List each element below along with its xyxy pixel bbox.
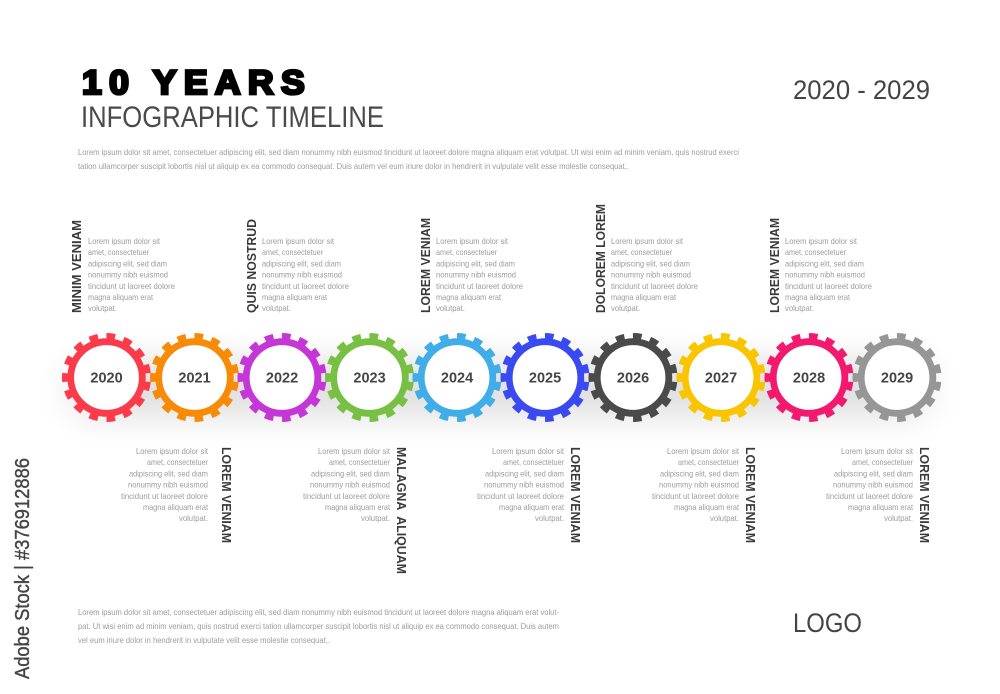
panel: upper text 1: nonummy nibh euismod [88,270,168,280]
panel: lower text 5: volutpat. [884,513,913,523]
gear 2026 [589,334,677,421]
subtitle: infographic timeline: INFOGRAPHIC TIMELINE [81,101,384,134]
panel: upper text 4: tincidunt ut laoreet dolore [611,281,698,291]
gear shadow [70,362,930,416]
panel: upper text 1: volutpat. [88,303,117,313]
panel: upper text 1: magna aliquam erat [88,292,154,302]
stock id side label: Adobe Stock | #376912886 [12,458,34,679]
panel: lower heading lorem veniam 4: LOREM VENIAM [917,447,931,543]
footer text block: Lorem ipsum dolor sit amet, consectetuer adipiscing elit, sed diam nonummy nibh euismod tincidunt ut laoreet dolore magna aliquam erat volut- [78,607,559,617]
logo: LOGO [793,608,862,638]
panel: upper text 4: Lorem ipsum dolor sit [611,236,684,246]
panel: upper text 4: amet, consectetuer [611,247,672,257]
panel: lower heading lorem veniam 3: LOREM VENIAM [743,447,757,543]
footer text block: pat. Ut wisi enim ad minim veniam, quis nostrud exerci tation ullamcorper suscipit lobortis nisl ut aliquip ex ea commodo consequat. Duis autem [78,621,559,631]
panel: lower text 2: volutpat. [361,513,390,523]
panel: upper text 1: amet, consectetuer [88,247,149,257]
panel: upper text 3: tincidunt ut laoreet dolore [436,281,523,291]
panel: upper text 3 [436,236,523,313]
panel: upper text 3: volutpat. [436,303,465,313]
footer text block [78,607,559,645]
panel: lower text 2: amet, consectetuer [329,457,390,467]
panel: upper text 2 [262,236,349,313]
panel: lower text 5: nonummy nibh euismod [833,480,913,490]
panel: upper text 2: volutpat. [262,303,291,313]
panel: lower heading lorem veniam 1: LOREM VENIAM [219,447,233,543]
panel: upper text 2: tincidunt ut laoreet dolore [262,281,349,291]
intro text block: tation ullamcorper suscipit lobortis nisl ut aliquip ex ea commodo consequat. Duis autem vel eum iriure dolor in hendrerit in vulputate velit esse molestie consequat,. [78,161,629,171]
panel: upper text 3: adipiscing elit, sed diam [436,258,515,268]
panel: upper heading quis nostrud: QUIS NOSTRUD [245,219,259,313]
panel: upper text 5: Lorem ipsum dolor sit [785,236,858,246]
gear 2027: 2027 [705,370,737,386]
panel: upper heading minim veniam: MINIM VENIAM [70,220,84,313]
panel: lower text 3: amet, consectetuer [503,457,564,467]
gear timeline [63,334,941,421]
panel: upper text 3: amet, consectetuer [436,247,497,257]
title: 10 years: 10 YEARS [82,64,312,102]
panel: upper text 5: volutpat. [785,303,814,313]
gear 2021 [151,334,238,421]
gear 2024: 2024 [441,370,473,386]
intro text block [78,147,739,171]
gear 2021: 2021 [178,370,211,386]
panel: upper text 4: magna aliquam erat [611,292,677,302]
panel: lower text 4: adipiscing elit, sed diam [660,468,739,478]
panel: upper text 5: nonummy nibh euismod [785,270,865,280]
panel: upper text 1: adipiscing elit, sed diam [88,258,167,268]
panel: lower text 3: nonummy nibh euismod [484,480,564,490]
panel: upper text 2: Lorem ipsum dolor sit [262,236,335,246]
gear 2029 [853,334,941,421]
panel: lower text 5: amet, consectetuer [852,457,913,467]
panel: upper text 3: nonummy nibh euismod [436,270,516,280]
panel: lower text 4: magna aliquam erat [674,502,740,512]
panel: upper text 5: amet, consectetuer [785,247,846,257]
panel: lower text 2: nonummy nibh euismod [310,480,390,490]
panel: lower text 1: magna aliquam erat [143,502,209,512]
panel: lower text 4: amet, consectetuer [678,457,739,467]
panel: lower text 4: volutpat. [710,513,739,523]
gear 2028 [765,334,853,421]
panel: lower text 5 [826,446,914,523]
panel: lower text 1: nonummy nibh euismod [128,480,208,490]
gear 2020: 2020 [90,370,123,386]
panel: upper text 2: nonummy nibh euismod [262,270,342,280]
panel: lower text 3: adipiscing elit, sed diam [485,468,564,478]
panel: upper text 2: adipiscing elit, sed diam [262,258,341,268]
gear 2026: 2026 [617,370,649,386]
panel: lower text 1: volutpat. [179,513,208,523]
panel: upper text 5: adipiscing elit, sed diam [785,258,864,268]
panel: lower text 5: tincidunt ut laoreet dolore [826,491,913,501]
panel: lower text 3: volutpat. [535,513,564,523]
panel: lower text 1: Lorem ipsum dolor sit [136,446,209,456]
panel: upper text 3: magna aliquam erat [436,292,502,302]
gear 2025: 2025 [529,370,561,386]
panel: lower text 3: Lorem ipsum dolor sit [492,446,565,456]
panel: upper heading lorem veniam 1: LOREM VENIAM [419,218,433,313]
gear 2029: 2029 [881,370,913,386]
panel: upper text 4 [611,236,698,313]
gear 2023: 2023 [353,370,386,386]
panel: lower text 4 [652,446,740,523]
panel: lower text 1: adipiscing elit, sed diam [129,468,208,478]
panel: lower text 3 [477,446,565,523]
panel: lower text 5: adipiscing elit, sed diam [834,468,913,478]
panel: lower text 2: Lorem ipsum dolor sit [318,446,391,456]
gear 2023 [326,334,413,421]
panel: lower heading malagna aliquam: MALAGNA ALIQUAM [394,447,408,574]
panel: lower text 2 [303,446,391,523]
gear 2027 [677,334,765,421]
panel: lower text 3: tincidunt ut laoreet dolore [477,491,564,501]
panel: lower text 2: adipiscing elit, sed diam [311,468,390,478]
panel: lower text 5: Lorem ipsum dolor sit [841,446,914,456]
panel: lower text 1: tincidunt ut laoreet dolore [121,491,208,501]
panel: lower heading lorem veniam 2: LOREM VENIAM [568,447,582,543]
panel: lower text 2: tincidunt ut laoreet dolore [303,491,390,501]
panel: upper text 3: Lorem ipsum dolor sit [436,236,509,246]
panel: upper text 5: magna aliquam erat [785,292,851,302]
panel: upper text 1: tincidunt ut laoreet dolore [88,281,175,291]
panel: lower text 1 [121,446,209,523]
panel: upper text 2: amet, consectetuer [262,247,323,257]
gear 2022 [238,334,326,421]
panel: lower text 5: magna aliquam erat [848,502,914,512]
gear 2022: 2022 [266,370,298,386]
panel: upper text 4: volutpat. [611,303,640,313]
panel: upper text 5: tincidunt ut laoreet dolore [785,281,872,291]
panel: lower text 4: tincidunt ut laoreet dolore [652,491,739,501]
date range: 2020 - 2029 [793,75,930,105]
panel: upper text 1 [88,236,175,313]
panel: upper heading lorem veniam 2: LOREM VENIAM [768,218,782,313]
panel: upper text 2: magna aliquam erat [262,292,328,302]
panel: upper text 1: Lorem ipsum dolor sit [88,236,161,246]
panel: upper heading dolorem lorem: DOLOREM LOREM [594,204,608,313]
intro text block: Lorem ipsum dolor sit amet, consectetuer adipiscing elit, sed diam nonummy nibh euismod tincidunt ut laoreet dolore magna aliquam erat volutpat. Ut wisi enim ad minim veniam, quis nostrud exerci [78,147,739,157]
panel: lower text 4: Lorem ipsum dolor sit [667,446,740,456]
footer text block: vel eum iriure dolor in hendrerit in vulputate velit esse molestie consequat,. [78,635,330,645]
panel: lower text 1: amet, consectetuer [147,457,208,467]
panel: upper text 4: nonummy nibh euismod [611,270,691,280]
gear 2025 [501,334,589,421]
panel: lower text 4: nonummy nibh euismod [659,480,739,490]
gear 2028: 2028 [793,370,825,386]
gear 2020 [63,334,150,421]
panel: lower text 2: magna aliquam erat [325,502,391,512]
panel: lower text 3: magna aliquam erat [499,502,565,512]
panel: upper text 5 [785,236,872,313]
panel: upper text 4: adipiscing elit, sed diam [611,258,690,268]
gear 2024 [413,334,501,421]
